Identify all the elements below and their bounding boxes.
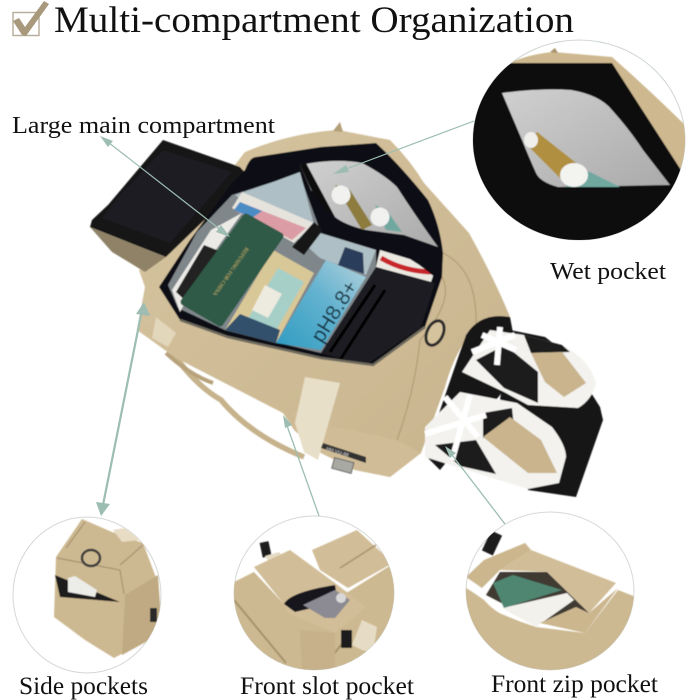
buckle strap [264, 552, 281, 561]
black interior [470, 60, 690, 245]
bottle gold [530, 132, 576, 179]
flap pocket [254, 550, 346, 604]
phone in pocket [303, 590, 350, 618]
buckle [482, 530, 502, 556]
bag: under-flap tan [90, 227, 166, 272]
bag: main compartment opening [159, 143, 443, 365]
buckle top [260, 541, 272, 558]
bottle teal [566, 168, 620, 187]
handle left [152, 317, 176, 347]
black umbrella handle [292, 222, 323, 255]
icon: checkbox with tick [13, 1, 49, 36]
compartment lining [168, 175, 376, 353]
bag: tab on top seam [333, 122, 343, 132]
front pocket [294, 413, 421, 477]
label: front zip pocket: Front zip pocket [491, 671, 658, 698]
label: wet pocket: Wet pocket [550, 259, 666, 285]
flap highlight [102, 150, 232, 243]
cream strap [295, 377, 340, 460]
small zipper [150, 608, 157, 622]
brand tag: HH·VU·88 [325, 446, 349, 459]
metal buckle [332, 458, 354, 473]
cream strap bottom [352, 620, 377, 653]
green box [493, 575, 562, 608]
bag: opened black top flap [90, 140, 249, 257]
tablet [232, 192, 314, 243]
shoe compartment opening [425, 316, 520, 470]
buckle bottom [341, 630, 352, 648]
white paper [502, 593, 574, 627]
panel: front zip pocket close-up [464, 512, 636, 672]
main bag photo illustration [90, 122, 603, 497]
front edge [324, 652, 336, 666]
D-ring [82, 550, 100, 566]
second handle [166, 353, 213, 383]
rolled patterned towel [225, 250, 314, 343]
lower pocket lip [540, 588, 618, 633]
pocket grey lining [502, 89, 670, 187]
left strap section [466, 543, 531, 588]
lighter rim [180, 320, 425, 365]
side bag body [54, 519, 162, 658]
bag: black mesh back pocket behind shoes [500, 330, 603, 497]
arrow: front zip pocket [445, 446, 521, 546]
handle loop [172, 352, 304, 457]
D-ring strap [422, 318, 448, 348]
bottle [276, 247, 366, 350]
side pocket zip [55, 575, 120, 602]
label: front slot pocket: Front slot pocket [240, 673, 414, 700]
bag: tan body [137, 130, 510, 477]
arrow: side pockets [96, 302, 150, 516]
upper shoe [462, 327, 596, 408]
seam [57, 522, 143, 594]
bag: side panel seam [397, 253, 476, 440]
top notch [113, 528, 140, 542]
arrow: front slot pocket [283, 415, 327, 535]
inner dark [486, 572, 589, 623]
towel, blue-grey [235, 172, 376, 275]
panel: side pockets close-up [13, 517, 162, 673]
bottle: pH8.8+ [307, 277, 362, 347]
black pouch with glasses [321, 267, 435, 365]
bag base [232, 562, 396, 672]
wet pocket inner [300, 161, 438, 247]
phone [68, 576, 97, 597]
pocket dark opening [284, 585, 338, 612]
green case: REFUSING FOR CHINA [211, 246, 249, 297]
stitch seam [234, 600, 345, 665]
green case [184, 217, 280, 323]
panel: front slot pocket close-up [232, 516, 396, 672]
arrow: large main compartment [100, 136, 230, 237]
lower shoe [425, 392, 566, 489]
bag bottom [464, 587, 636, 672]
arrow: wet pocket [333, 121, 474, 174]
red and white towel [376, 250, 436, 282]
tan top edge [510, 52, 685, 170]
white notepad [172, 213, 242, 312]
label: side pockets: Side pockets [19, 673, 148, 700]
title: Multi-compartment Organization [54, 0, 574, 41]
bottle caps [524, 132, 538, 148]
brand tag [321, 443, 366, 463]
side panel shade [122, 575, 162, 655]
patterned pouch [176, 245, 222, 305]
tab [550, 48, 558, 53]
right pouch [312, 530, 393, 588]
panel: wet pocket close-up [470, 40, 690, 245]
upper pocket flap [500, 550, 616, 613]
black divider band [340, 228, 442, 280]
label: large main compartment: Large main compartment [12, 113, 275, 139]
